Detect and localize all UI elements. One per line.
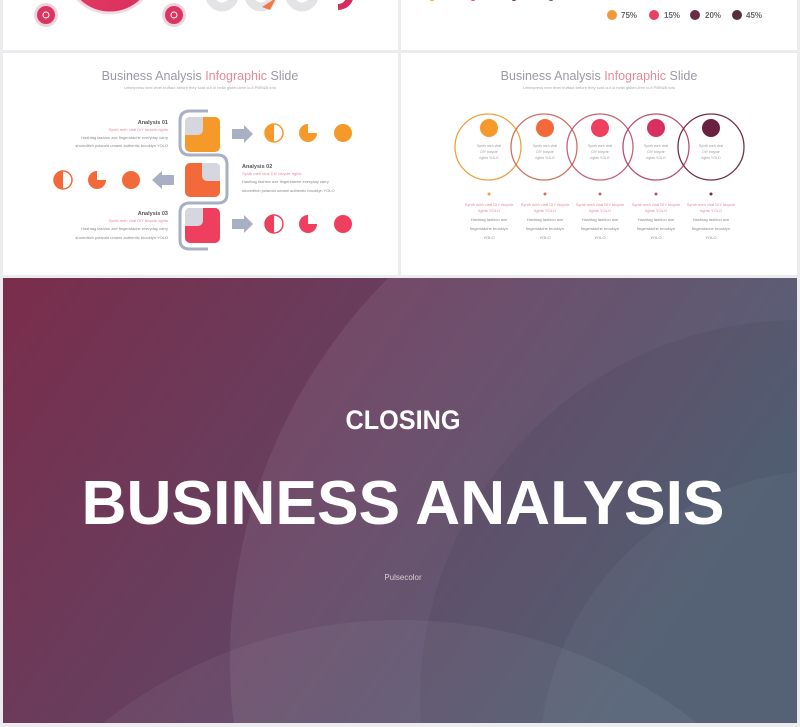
legend item 20%: 20% (705, 11, 721, 20)
circle icons and text: DIY bicycle (702, 150, 720, 154)
title: BUSINESS ANALYSIS: BUSINESS ANALYSIS (82, 469, 724, 538)
circle icons and text: DIY bicycle (480, 150, 498, 154)
circle icons and text: rights YOLO (479, 156, 499, 160)
heading: middle left: Letterpress next level truffaut before they sold out ut hella gluten-free lo-fi PBR&B tofu (124, 85, 276, 90)
circle icons and text: rights YOLO (590, 156, 610, 160)
analysis texts: Analysis 03 (138, 211, 168, 217)
bottom captions: fingerstache brooklyn (581, 226, 619, 231)
circle icons and text: DIY bicycle (647, 150, 665, 154)
analysis texts: Hashtag fashion axe fingerstache everyday carry (81, 135, 168, 140)
bottom captions: Hashtag fashion axe (471, 217, 508, 222)
panel: middle left (3, 53, 398, 275)
bottom captions: YOLO (705, 235, 717, 240)
gray donuts (210, 0, 314, 7)
bottom captions: YOLO (539, 235, 551, 240)
legend item 15%: 15% (664, 11, 680, 20)
circle icons and text: rights YOLO (535, 156, 555, 160)
bottom captions: rights YOLO (645, 208, 667, 213)
circle icons and text (477, 119, 723, 160)
circle icons and text: Synth meh viral (477, 144, 501, 148)
bottom captions: fingerstache brooklyn (526, 226, 564, 231)
bottom captions: Synth meh viral DIY bicycle (521, 202, 570, 207)
bottom captions: fingerstache brooklyn (692, 226, 730, 231)
legend item 75%: 75% (621, 11, 637, 20)
circle icons and text: DIY bicycle (536, 150, 554, 154)
pies row 3 (265, 215, 352, 233)
pies row 2 (54, 171, 140, 189)
circle icons and text: rights YOLO (646, 156, 666, 160)
heading: middle left (102, 69, 298, 90)
bottom captions: fingerstache brooklyn (470, 226, 508, 231)
legend item 45%: 45% (746, 11, 762, 20)
analysis texts: Synth meh viral DIY bicycle rights (108, 127, 168, 132)
icon: small circle right (162, 3, 186, 27)
heading: middle right (501, 69, 697, 90)
circle icons and text: Synth meh viral (644, 144, 668, 148)
bottom captions: Synth meh viral DIY bicycle (576, 202, 625, 207)
linked circles (455, 114, 744, 180)
subtitle: CLOSING: CLOSING (346, 405, 460, 435)
panel: middle right (401, 53, 797, 275)
legend item 45% (732, 10, 762, 20)
circle icons and text: Synth meh viral (533, 144, 557, 148)
bottom captions: fingerstache brooklyn (637, 226, 675, 231)
heading: middle left: Business Analysis Infographic Slide (102, 69, 298, 83)
bottom captions: Hashtag fashion axe (582, 217, 619, 222)
icon: small circle left (34, 3, 58, 27)
big pink circle (65, 0, 155, 13)
bottom captions: Hashtag fashion axe (527, 217, 564, 222)
bottom captions: Synth meh viral DIY bicycle (465, 202, 514, 207)
circle icons and text: DIY bicycle (591, 150, 609, 154)
top-right legend (429, 0, 762, 20)
circle icons and text: rights YOLO (701, 156, 721, 160)
analysis texts (75, 120, 335, 240)
bottom captions: rights YOLO (534, 208, 556, 213)
byline: Pulsecolor (384, 573, 422, 582)
analysis texts: Hashtag fashion axe fingerstache everyday carry (81, 226, 168, 231)
pies row 1 (265, 124, 352, 142)
bottom captions: YOLO (594, 235, 606, 240)
panel: top left (3, 0, 398, 50)
analysis boxes (185, 117, 220, 243)
bottom captions: Hashtag fashion axe (693, 217, 730, 222)
analysis texts: Synth meh viral DIY bicycle rights (242, 171, 302, 176)
bottom captions: Synth meh viral DIY bicycle (632, 202, 681, 207)
analysis texts: Analysis 01 (138, 120, 168, 126)
top-left slide fragment (34, 0, 354, 27)
heading: middle right: Letterpress next level truffaut before they sold out ut hella gluten-free lo-fi PBR&B tofu (523, 85, 675, 90)
analysis texts: Analysis 02 (242, 164, 272, 170)
legend item 20% (690, 10, 721, 20)
analysis texts: shoreditch polaroid umami authentic brooklyn YOLO (75, 143, 168, 148)
analysis texts: Synth meh viral DIY bicycle rights (108, 218, 168, 223)
circle icons and text: Synth meh viral (699, 144, 723, 148)
bottom captions (465, 192, 736, 240)
arrows (152, 125, 253, 233)
panel: top right (401, 0, 797, 50)
legend item 75% (607, 10, 637, 20)
bottom captions: rights YOLO (700, 208, 722, 213)
bottom captions: Hashtag fashion axe (638, 217, 675, 222)
bottom captions: rights YOLO (478, 208, 500, 213)
analysis texts: shoreditch polaroid umami authentic brooklyn YOLO (242, 188, 335, 193)
analysis texts: shoreditch polaroid umami authentic brooklyn YOLO (75, 235, 168, 240)
analysis texts: Hashtag fashion axe fingerstache everyday carry (242, 179, 329, 184)
heading: middle right: Business Analysis Infographic Slide (501, 69, 697, 83)
closing panel (3, 278, 797, 723)
legend item 15% (649, 10, 680, 20)
circle icons and text: Synth meh viral (588, 144, 612, 148)
bottom captions: Synth meh viral DIY bicycle (687, 202, 736, 207)
bottom captions: YOLO (483, 235, 495, 240)
connector bracket (180, 111, 227, 249)
bottom captions: YOLO (650, 235, 662, 240)
bottom captions: rights YOLO (589, 208, 611, 213)
